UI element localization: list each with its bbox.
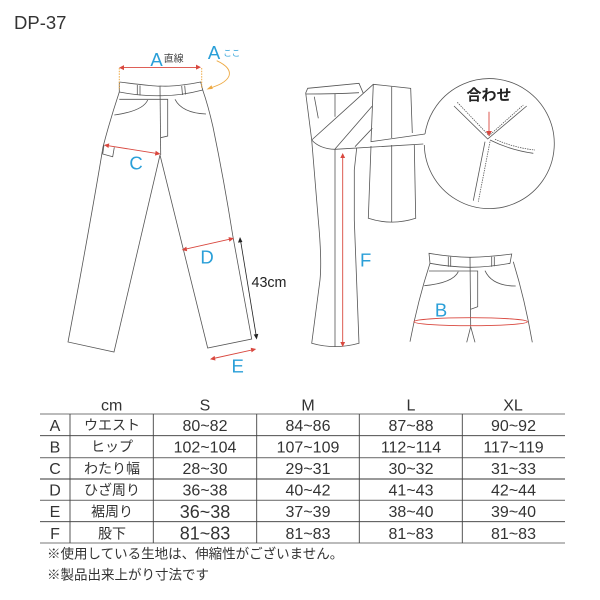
row E: 37~39: [286, 504, 331, 521]
dimension E: [210, 348, 256, 360]
label: E: E: [232, 356, 244, 376]
row A: 87~88: [389, 418, 434, 435]
detail circle: seam junction: [424, 79, 554, 209]
row F: F: [50, 526, 60, 543]
row C: 30~32: [389, 461, 434, 478]
note: fabric: ※使用している生地は、伸縮性がございません。: [47, 546, 343, 562]
pants outline: [68, 82, 252, 352]
row C: [49, 460, 536, 478]
size table: [40, 398, 565, 544]
illustration: side view with folded inseam: [306, 83, 425, 347]
row D: D: [49, 483, 61, 500]
side view outline: [306, 83, 425, 347]
row D: ひざ周り: [84, 482, 140, 498]
illustration: hip view: [410, 253, 532, 342]
label: seam match: 合わせ: [466, 87, 512, 104]
row E: 38~40: [389, 504, 434, 521]
label: C: C: [129, 152, 143, 174]
row F: 81~83: [491, 526, 536, 543]
label: 43cm: 43cm: [252, 275, 286, 291]
label: straight line: 直線: [164, 52, 184, 65]
label: F: F: [360, 250, 371, 270]
row A: 90~92: [491, 418, 536, 435]
measurement B ellipse: [414, 318, 527, 326]
label: A here: A: [208, 42, 221, 63]
dimension D: [182, 237, 234, 251]
row E: 裾周り: [91, 504, 133, 520]
arrow: seam point: [486, 112, 492, 136]
row D: 40~42: [286, 483, 331, 500]
row B: 112~114: [381, 440, 441, 456]
table header: M: [301, 398, 315, 414]
row A: [50, 417, 536, 435]
label: B: B: [435, 300, 447, 320]
label: here: ここ: [223, 48, 240, 58]
illustration: front view of pants: [68, 42, 286, 376]
row B: 117~119: [483, 440, 544, 456]
row B: ヒップ: [91, 438, 133, 454]
row D: 42~44: [491, 483, 536, 500]
row D: [49, 482, 536, 500]
row C: 31~33: [491, 461, 536, 478]
row C: C: [49, 461, 61, 478]
hip outline: [410, 253, 532, 342]
row A: A: [50, 418, 61, 435]
row F: [50, 524, 536, 544]
row B: 107~109: [277, 440, 339, 456]
row E: 39~40: [491, 504, 536, 521]
seams: [454, 102, 535, 202]
row A: 84~86: [286, 418, 331, 435]
row B: B: [50, 440, 60, 456]
note: measurements: ※製品出来上がり寸法です: [47, 568, 209, 582]
title: DP-37: [14, 12, 66, 33]
arrow: orange pointer: [206, 61, 229, 90]
row F: 股下: [98, 526, 126, 542]
row D: 36~38: [183, 483, 228, 500]
row D: 41~43: [389, 483, 434, 500]
row E: [50, 502, 536, 522]
label: D: D: [200, 246, 214, 268]
row F: 81~83: [389, 526, 434, 543]
dimension F: [340, 153, 345, 347]
row F: 81~83: [180, 524, 230, 544]
row C: 28~30: [183, 461, 228, 478]
dimension A straight: [119, 65, 202, 90]
row E: 36~38: [180, 502, 230, 522]
row C: わたり幅: [84, 460, 140, 476]
table header: cm: [101, 398, 122, 414]
row B: 102~104: [174, 440, 236, 456]
table grid: [40, 414, 565, 543]
row A: ウエスト: [84, 417, 140, 433]
row A: 80~82: [183, 418, 228, 435]
row E: E: [50, 504, 60, 521]
row B: [50, 438, 544, 456]
dimension C: [104, 143, 160, 156]
table header: [101, 398, 523, 414]
table header: L: [407, 398, 416, 414]
row F: 81~83: [286, 526, 331, 543]
circle outline: [424, 79, 554, 209]
dimension 43cm: [238, 237, 258, 340]
label: A straight: A: [150, 49, 163, 70]
row C: 29~31: [286, 461, 331, 478]
table header: S: [200, 398, 210, 414]
table header: XL: [503, 398, 523, 414]
